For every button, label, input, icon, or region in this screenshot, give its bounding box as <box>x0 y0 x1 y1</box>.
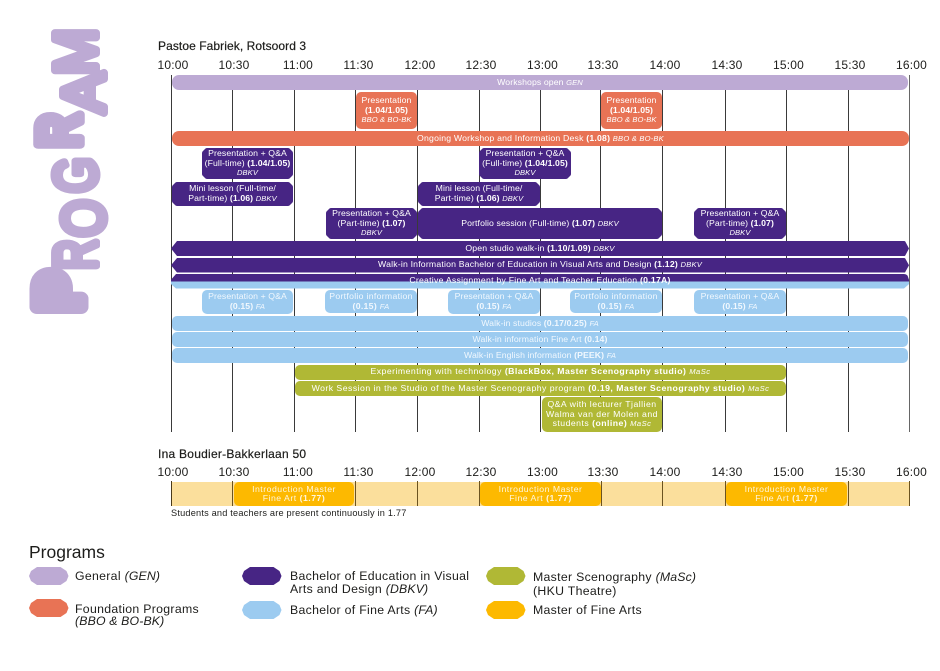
time axis: Ina Boudier-Bakkerlaan: 15:00 <box>773 465 804 479</box>
time axis: Ina Boudier-Bakkerlaan: 11:00 <box>283 465 313 479</box>
bar: Presentation Q&A full-time 2: (Full-time) (1.04/1.05) <box>482 158 568 168</box>
bar: Presentation Q&A part-time 1 <box>326 208 417 239</box>
time axis: Pastoe Fabriek: 15:00 <box>773 58 804 72</box>
title: PROGRAM vertical lettering: R <box>26 113 93 148</box>
bar: Mini lesson 1: Part-time) (1.06) DBKV <box>188 193 277 203</box>
bar: Presentation Q&A full-time 2 <box>479 148 571 179</box>
bar: Ongoing workshop <box>172 131 909 146</box>
legend swatch: FA <box>242 601 282 619</box>
time axis: Pastoe Fabriek: 10:30 <box>218 58 250 72</box>
bar: Ongoing workshop: Ongoing Workshop and Information Desk (1.08) BBO & BO-BK <box>417 133 664 143</box>
bar: Work session <box>295 381 786 396</box>
legend text: DBKV: Arts and Design (DBKV) <box>290 582 428 596</box>
time axis: Ina Boudier-Bakkerlaan: 16:00 <box>896 465 927 479</box>
time axis: Ina Boudier-Bakkerlaan: 10:30 <box>218 465 250 479</box>
bar: Presentation Q&A part-time 2 <box>694 208 786 239</box>
time axis: Pastoe Fabriek: 14:30 <box>711 58 743 72</box>
bar: Presentation foundation 1 <box>356 92 417 129</box>
bar: Portfolio session: Portfolio session (Full-time) (1.07) DBKV <box>461 218 619 228</box>
bar: Mini lesson 1 <box>172 182 293 206</box>
legend swatch: MaSc <box>486 567 526 585</box>
bar: Mini lesson 1: Mini lesson (Full-time/ <box>189 183 276 193</box>
bar: Presentation foundation 1: Presentation <box>362 95 411 105</box>
bar: Presentation foundation 2: Presentation <box>606 95 656 105</box>
time axis: Ina Boudier-Bakkerlaan: 14:00 <box>649 465 681 479</box>
legend text: MaSc: (HKU Theatre) <box>533 584 617 598</box>
bar: FA portfolio 1: (0.15) FA <box>353 300 389 310</box>
legend text: MaSc <box>533 570 696 598</box>
bar: Mini lesson 2: Part-time) (1.06) DBKV <box>435 193 523 203</box>
bar: Walk-in studios: Walk-in studios (0.17/0.25) FA <box>481 318 599 328</box>
bar: FA portfolio 2: Portfolio information <box>574 291 658 301</box>
bar: Introduction Master Fine Art 1: Fine Art (1.77) <box>263 493 325 503</box>
bar: Workshops open: Workshops open GEN <box>497 77 583 87</box>
bar: Workshops open <box>172 75 908 90</box>
bar: Mini lesson 2 <box>418 182 540 206</box>
bar: Walk-in information Fine Art: Walk-in information Fine Art (0.14) <box>472 334 607 344</box>
bar: FA presentation 2: Presentation + Q&A <box>455 291 533 301</box>
bar: FA presentation 1 <box>202 290 293 314</box>
time axis: Ina Boudier-Bakkerlaan: 13:00 <box>527 465 558 479</box>
bar: Walk-in studios <box>172 316 908 331</box>
bar: Introduction Master Fine Art 1: Introduction Master <box>252 484 336 494</box>
bar: FA presentation 3: Presentation + Q&A <box>701 291 779 301</box>
bar: Introduction Master Fine Art 2: Introduction Master <box>499 484 582 494</box>
bar: FA portfolio 2: (0.15) FA <box>598 300 634 310</box>
bar: Q&A with lecturer: students (online) MaSc <box>553 418 651 428</box>
bar: Introduction Master Fine Art 3: Introduction Master <box>745 484 828 494</box>
bar: Presentation Q&A part-time 2: Presentation + Q&A <box>701 208 779 218</box>
time axis: Ina Boudier-Bakkerlaan: 10:00 <box>157 465 189 479</box>
heading: Pastoe Fabriek: Pastoe Fabriek, Rotsoord 3 <box>158 39 306 53</box>
time axis: Pastoe Fabriek: 14:00 <box>649 58 681 72</box>
title: PROGRAM vertical lettering: P <box>24 272 96 311</box>
time axis: Ina Boudier-Bakkerlaan: 12:30 <box>465 465 497 479</box>
bar: FA presentation 1: Presentation + Q&A <box>208 291 287 301</box>
bar: Presentation Q&A full-time 1: (Full-time) (1.04/1.05) <box>205 158 290 168</box>
title: PROGRAM vertical lettering: R <box>42 239 109 270</box>
bar: Presentation Q&A part-time 2: DBKV <box>729 228 751 237</box>
bar: Presentation Q&A full-time 1: DBKV <box>237 168 258 177</box>
bar: Introduction Master Fine Art 1 <box>234 482 354 506</box>
bar: Portfolio session <box>418 208 662 239</box>
time axis: Pastoe Fabriek: 12:30 <box>465 58 497 72</box>
bar: FA presentation 2 <box>448 290 540 314</box>
title: PROGRAM vertical lettering: M <box>44 28 109 75</box>
legend text: Foundation <box>75 602 199 628</box>
legend swatch: DBKV <box>242 567 282 585</box>
bar: Work session: Work Session in the Studio of the Master Scenography program (0.19, Master Scenography studio) MaSc <box>312 383 769 393</box>
time axis: Pastoe Fabriek: 16:00 <box>896 58 927 72</box>
bar: Presentation Q&A part-time 1: (Part-time) (1.07) <box>338 218 405 228</box>
bar: FA presentation 1: (0.15) FA <box>230 301 265 311</box>
bar: Mini lesson 2: Mini lesson (Full-time/ <box>436 183 522 193</box>
bar: Presentation foundation 2 <box>601 92 662 129</box>
legend swatch: MFA <box>486 601 526 619</box>
legend text: DBKV <box>290 568 469 596</box>
bar: Walk-in English information: Walk-in English information (PEEK) FA <box>464 350 616 360</box>
bar: Experimenting with technology <box>295 365 786 380</box>
bar: Presentation Q&A part-time 1: Presentation + Q&A <box>332 208 411 218</box>
title: PROGRAM vertical lettering: G <box>44 157 109 193</box>
legend swatch: Foundation <box>29 599 68 617</box>
legend text: FA: Bachelor of Fine Arts (FA) <box>290 602 438 616</box>
time axis: Pastoe Fabriek: 13:00 <box>527 58 558 72</box>
title: PROGRAM vertical lettering: A <box>51 73 117 113</box>
bar: Open studio walk-in: Open studio walk-in (1.10/1.09) DBKV <box>465 243 615 253</box>
bar: Creative assignment <box>171 274 909 288</box>
bar: Experimenting with technology: Experimenting with technology (BlackBox, Master Scenography studio) MaSc <box>370 366 711 376</box>
bar: Walk-in information Fine Art <box>172 332 908 347</box>
legend text: Foundation: Foundation Programs <box>75 602 199 616</box>
heading: Ina Boudier-Bakkerlaan: Ina Boudier-Bakkerlaan 50 <box>158 447 306 461</box>
title: PROGRAM vertical lettering <box>24 28 117 314</box>
bar: Presentation Q&A full-time 2: Presentation + Q&A <box>486 148 564 158</box>
bar: Presentation Q&A part-time 1: DBKV <box>361 228 382 237</box>
bar: FA portfolio 2 <box>570 290 662 313</box>
bar: Introduction Master Fine Art 3: Fine Art (1.77) <box>755 493 818 503</box>
time axis: Pastoe Fabriek: 15:30 <box>834 58 866 72</box>
legend text: General: General (GEN) <box>75 569 160 583</box>
bar: Presentation Q&A full-time 1: Presentation + Q&A <box>208 148 287 158</box>
legend text: MaSc: Master Scenography (MaSc) <box>533 570 696 584</box>
time axis: Ina Boudier-Bakkerlaan <box>157 465 927 479</box>
legend text: MFA: Master of Fine Arts <box>533 602 642 616</box>
bar: Presentation Q&A full-time 1 <box>202 148 293 179</box>
legend text: DBKV: Bachelor of Education in Visual <box>290 568 469 582</box>
legend text: Foundation: (BBO & BO-BK) <box>75 614 164 628</box>
time axis: Pastoe Fabriek: 11:00 <box>283 58 313 72</box>
time axis: Ina Boudier-Bakkerlaan: 11:30 <box>343 465 374 479</box>
note: continuous presence: Students and teachers are present continuously in 1.77 <box>171 508 407 518</box>
bar: Introduction Master Fine Art 2: Fine Art (1.77) <box>509 493 572 503</box>
bar: Introduction Master Fine Art 2 <box>480 482 601 506</box>
time axis: Ina Boudier-Bakkerlaan: 15:30 <box>834 465 866 479</box>
legend heading: Programs <box>29 542 105 562</box>
bar: Q&A with lecturer: Walma van der Molen and <box>546 409 658 419</box>
bar: Introduction Master Fine Art 3 <box>726 482 847 506</box>
time axis: Pastoe Fabriek <box>157 58 927 72</box>
band: continuous presence background <box>172 482 909 506</box>
bar: Walk-in information BEd: Walk-in Information Bachelor of Education in Visual Arts and Design (1.12) DBKV <box>378 259 702 269</box>
time axis: Pastoe Fabriek: 13:30 <box>587 58 619 72</box>
bar: Presentation Q&A full-time 2: DBKV <box>514 168 536 177</box>
bar: Walk-in information BEd <box>171 258 909 272</box>
bar: Presentation foundation 1: BBO & BO-BK <box>361 115 412 124</box>
bar: Creative assignment: Creative Assignment by Fine Art and Teacher Education (0.17A) <box>409 275 671 285</box>
bar: FA presentation 3 <box>694 290 786 314</box>
time axis: Pastoe Fabriek: 12:00 <box>404 58 436 72</box>
bar: FA portfolio 1 <box>325 290 417 313</box>
time axis: Ina Boudier-Bakkerlaan: 12:00 <box>404 465 436 479</box>
legend <box>29 542 696 628</box>
bar: Presentation foundation 2: BBO & BO-BK <box>606 115 657 124</box>
bar: Q&A with lecturer <box>542 397 662 432</box>
time axis: Ina Boudier-Bakkerlaan: 13:30 <box>587 465 619 479</box>
bar: Presentation foundation 2: (1.04/1.05) <box>610 105 653 115</box>
bar: FA portfolio 1: Portfolio information <box>329 291 413 301</box>
bar: Presentation Q&A part-time 2: (Part-time) (1.07) <box>706 218 774 228</box>
legend swatch: General <box>29 567 68 585</box>
title: PROGRAM vertical lettering: O <box>52 199 117 237</box>
bar: Walk-in English information <box>172 348 908 363</box>
time axis: Ina Boudier-Bakkerlaan: 14:30 <box>711 465 743 479</box>
bar: Open studio walk-in <box>171 241 909 256</box>
bar: FA presentation 3: (0.15) FA <box>722 301 758 311</box>
bar: Presentation foundation 1: (1.04/1.05) <box>365 105 408 115</box>
time axis: Pastoe Fabriek: 11:30 <box>343 58 374 72</box>
time axis: Pastoe Fabriek: 10:00 <box>157 58 189 72</box>
bar: FA presentation 2: (0.15) FA <box>476 301 512 311</box>
bar: Q&A with lecturer: Q&A with lecturer Tjallien <box>547 399 657 409</box>
